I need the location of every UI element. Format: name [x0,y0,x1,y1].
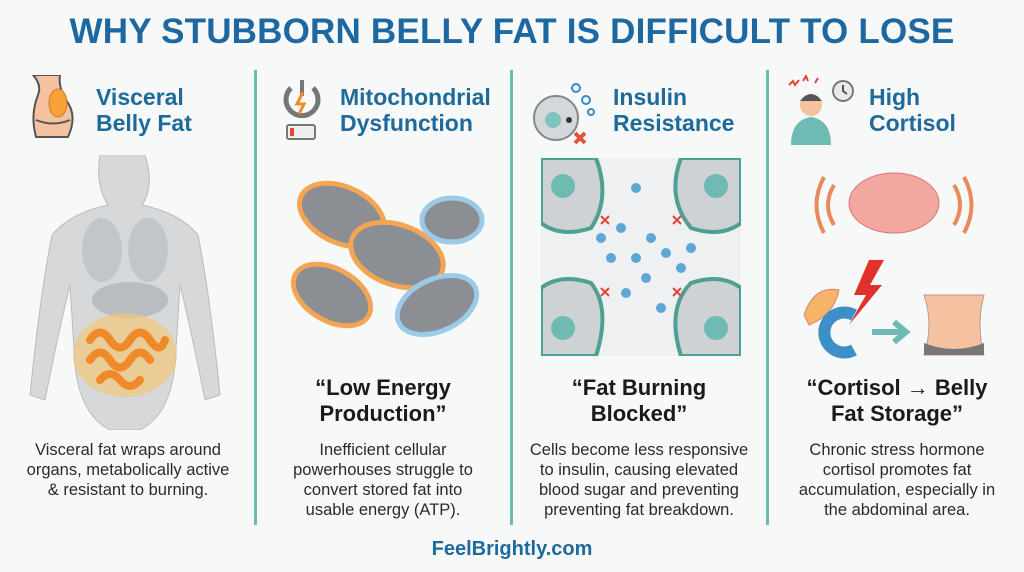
heading: Visceral [96,84,184,110]
footer: FeelBrightly.com [432,538,592,560]
heading: Insulin [613,84,687,110]
illustration: mitochondria [290,180,484,337]
body text: accumulation, especially in [799,481,995,499]
heading [340,84,491,136]
panel: visceral belly fat [27,75,229,499]
quote: “Cortisol → Belly [807,375,987,400]
body text: Cells become less responsive [530,441,748,459]
body text: & resistant to burning. [48,481,208,499]
icon: power and battery [284,80,320,140]
illustration: body with visceral fat [30,155,220,430]
title: WHY STUBBORN BELLY FAT IS DIFFICULT TO LOSE [70,12,954,51]
body text: Inefficient cellular [319,441,447,459]
quote [315,375,451,426]
body text: the abdominal area. [824,501,970,519]
quote: “Fat Burning [572,375,706,400]
body text: usable energy (ATP). [306,501,460,519]
illustration: cells and insulin [541,158,741,356]
body text: cortisol promotes fat [823,461,971,479]
body text: to insulin, causing elevated [540,461,738,479]
quote [572,375,706,426]
quote: Fat Storage” [831,401,963,426]
body text: preventing fat breakdown. [544,501,734,519]
heading [613,84,734,136]
body text [530,441,748,519]
icon: stressed person [788,75,854,145]
body text: organs, metabolically active [27,461,229,479]
body text: Visceral fat wraps around [35,441,221,459]
quote: “Low Energy [315,375,451,400]
body text [293,441,473,519]
panel: high cortisol [788,75,995,519]
panel: mitochondrial dysfunction [284,80,491,519]
heading: High [869,84,920,110]
heading [96,84,192,136]
body text: blood sugar and preventing [539,481,739,499]
quote: Production” [319,401,447,426]
body text: Chronic stress hormone [809,441,985,459]
quote: Blocked” [591,401,687,426]
heading: Cortisol [869,110,956,136]
quote [807,375,988,426]
icon: cell with lock [533,83,595,144]
body text [27,441,229,499]
heading: Dysfunction [340,110,473,136]
heading: Mitochondrial [340,84,491,110]
icon: belly [32,75,74,138]
heading [869,84,956,136]
heading: Belly Fat [96,110,192,136]
illustration: brain to belly [804,172,985,358]
body text: powerhouses struggle to [293,461,473,479]
panel: insulin resistance [530,83,748,519]
body text [799,441,995,519]
body text: convert stored fat into [304,481,462,499]
heading: Resistance [613,110,734,136]
